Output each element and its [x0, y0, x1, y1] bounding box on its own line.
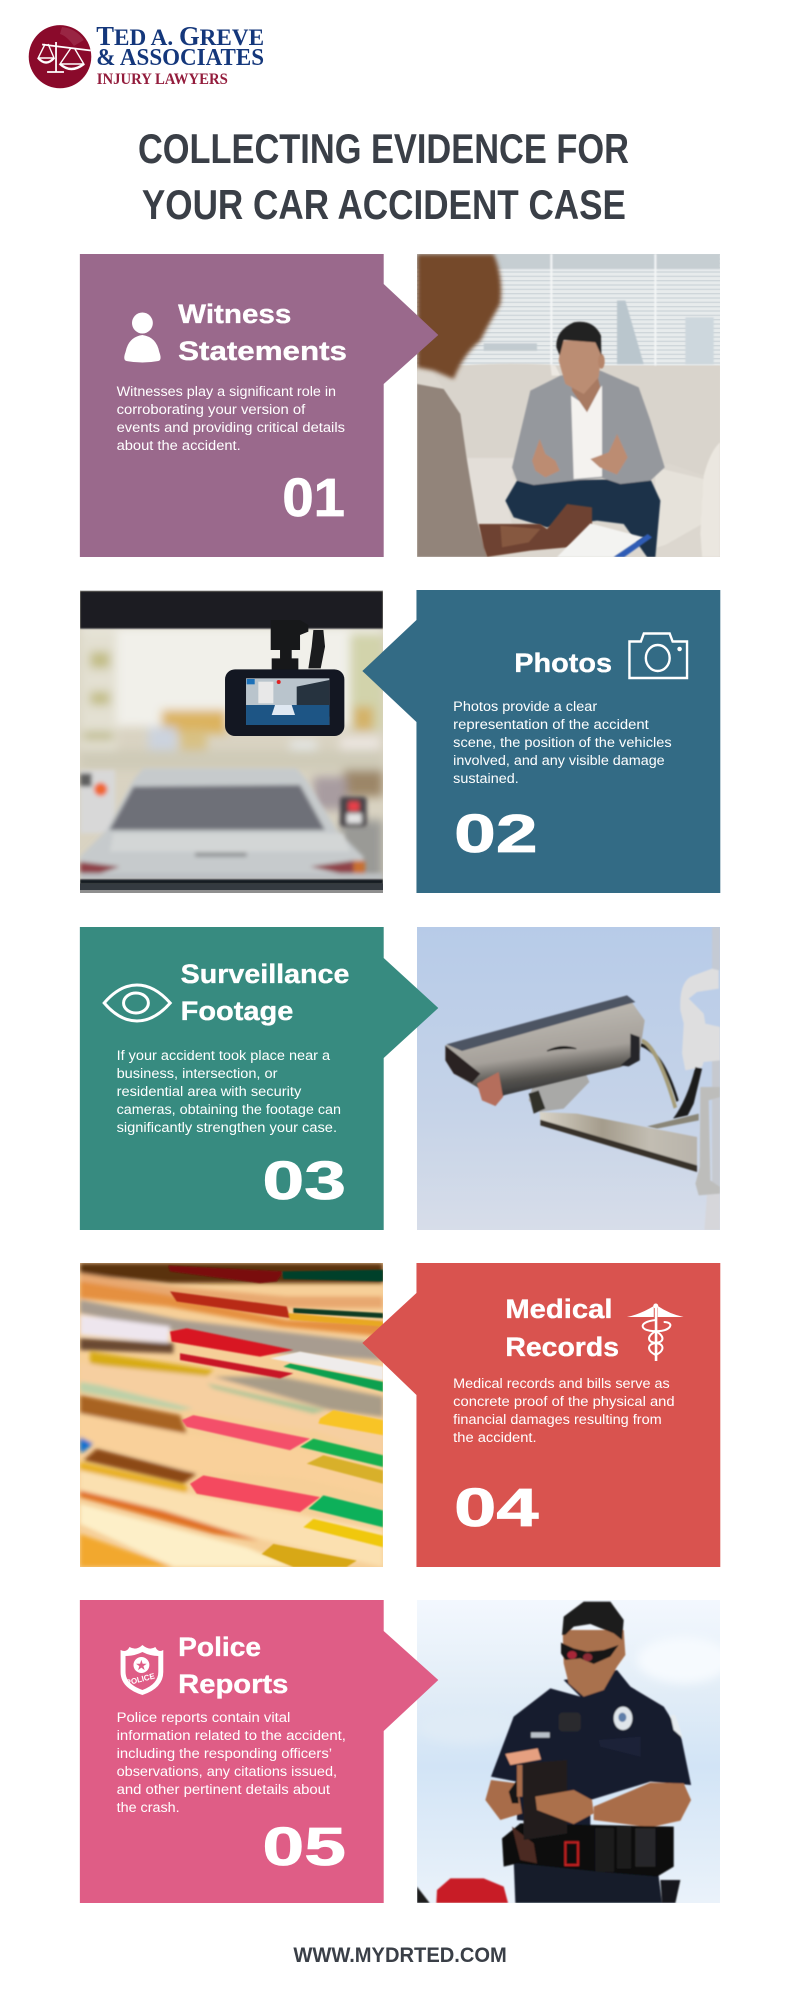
body text: and other pertinent details about [117, 1781, 330, 1797]
body text: Photos provide a clear [453, 698, 598, 714]
photo: security camera against the sky [417, 927, 720, 1230]
body text: If your accident took place near a [117, 1047, 330, 1063]
heading: surveillance footage: Footage [181, 996, 293, 1026]
heading: surveillance footage: Surveillance [181, 959, 349, 989]
camera bracket [529, 1069, 697, 1172]
sofa [430, 364, 720, 476]
body text [453, 1375, 675, 1445]
body text [453, 698, 672, 786]
red vehicle mirror [417, 1878, 508, 1903]
icon: police badge: ★ [135, 1657, 148, 1673]
heading: medical records [505, 1294, 619, 1362]
heading: police reports: Police [178, 1632, 261, 1662]
logo emblem: scales of justice [29, 25, 91, 88]
dashcam [225, 620, 344, 736]
tablet and hand [523, 1760, 567, 1840]
heading: photos: Photos [514, 648, 612, 678]
number 04: 04 [454, 1478, 539, 1538]
body text: including the responding officers’ [117, 1745, 332, 1761]
body text [117, 1047, 341, 1135]
foreground woman [417, 254, 652, 557]
badge, radio and nameplate [614, 1707, 632, 1730]
body text: observations, any citations issued, [117, 1763, 337, 1779]
duty belt [502, 1823, 674, 1877]
number 03: 03 [263, 1151, 346, 1211]
title [138, 125, 629, 228]
body text: scene, the position of the vehicles [453, 734, 672, 750]
body text: about the accident. [117, 437, 241, 453]
body text: the accident. [453, 1429, 537, 1445]
body text: events and providing critical details [117, 419, 345, 435]
number 02: 02 [454, 804, 538, 864]
body text: business, intersection, or [117, 1065, 278, 1081]
panel: 05 police reports [80, 1600, 438, 1903]
body text: corroborating your version of [117, 401, 305, 417]
body text [117, 383, 345, 453]
panel: 04 medical records [362, 1263, 720, 1567]
client figure [505, 322, 665, 557]
head [564, 1670, 630, 1700]
camera housing [445, 995, 645, 1106]
body text [117, 1709, 346, 1815]
body text: Witnesses play a significant role in [117, 383, 336, 399]
body text: concrete proof of the physical and [453, 1393, 675, 1409]
icon: caduceus [627, 1304, 684, 1361]
pole and fixture [640, 927, 720, 1230]
logo wordmark: TED A. GREVE [96, 21, 264, 51]
heading: medical records: Records [505, 1332, 619, 1362]
body text: significantly strengthen your case. [117, 1119, 337, 1135]
icon: camera [629, 634, 687, 678]
body text: representation of the accident [453, 716, 649, 732]
title: COLLECTING EVIDENCE FOR [138, 125, 629, 172]
icon: police badge: POLICE [125, 1672, 156, 1687]
logo wordmark: & ASSOCIATES [96, 45, 264, 71]
icon: person [124, 312, 161, 362]
body text: residential area with security [117, 1083, 301, 1099]
heading: witness statements [178, 299, 347, 366]
heading: medical records: Medical [505, 1294, 613, 1324]
officer [485, 1602, 691, 1903]
logo wordmark [96, 21, 264, 88]
title: YOUR CAR ACCIDENT CASE [142, 181, 626, 228]
body text: Medical records and bills serve as [453, 1375, 670, 1391]
photo: police officer writing a report [417, 1600, 720, 1903]
panel: 01 witness statements [80, 254, 438, 557]
body text: financial damages resulting from [453, 1411, 662, 1427]
number 05: 05 [263, 1817, 346, 1877]
body text: information related to the accident, [117, 1727, 346, 1743]
heading: witness statements: Witness [178, 299, 291, 329]
blurred car ahead [80, 768, 383, 881]
heading: police reports: Reports [178, 1669, 288, 1699]
heading: witness statements: Statements [178, 336, 347, 366]
body text: the crash. [117, 1799, 180, 1815]
heading: police reports [178, 1632, 288, 1699]
photo: dashcam mounted on a windshield [80, 590, 383, 893]
photo: stack of colourful file folders [80, 1263, 383, 1567]
body text: Police reports contain vital [117, 1709, 290, 1725]
heading: surveillance footage [181, 959, 349, 1026]
body text: cameras, obtaining the footage can [117, 1101, 341, 1117]
number 01: 01 [282, 468, 345, 528]
footer website: WWW.MYDRTED.COM [293, 1944, 507, 1967]
panel: 03 surveillance footage [80, 927, 438, 1230]
logo wordmark: INJURY LAWYERS [97, 71, 228, 88]
icon: police badge [121, 1645, 163, 1695]
photo: client talking with a lawyer on a sofa [417, 254, 720, 557]
body text: involved, and any visible damage [453, 752, 665, 768]
icon: eye [104, 985, 170, 1021]
logo [29, 21, 264, 88]
body text: sustained. [453, 770, 519, 786]
panel: 02 photos [362, 590, 720, 893]
